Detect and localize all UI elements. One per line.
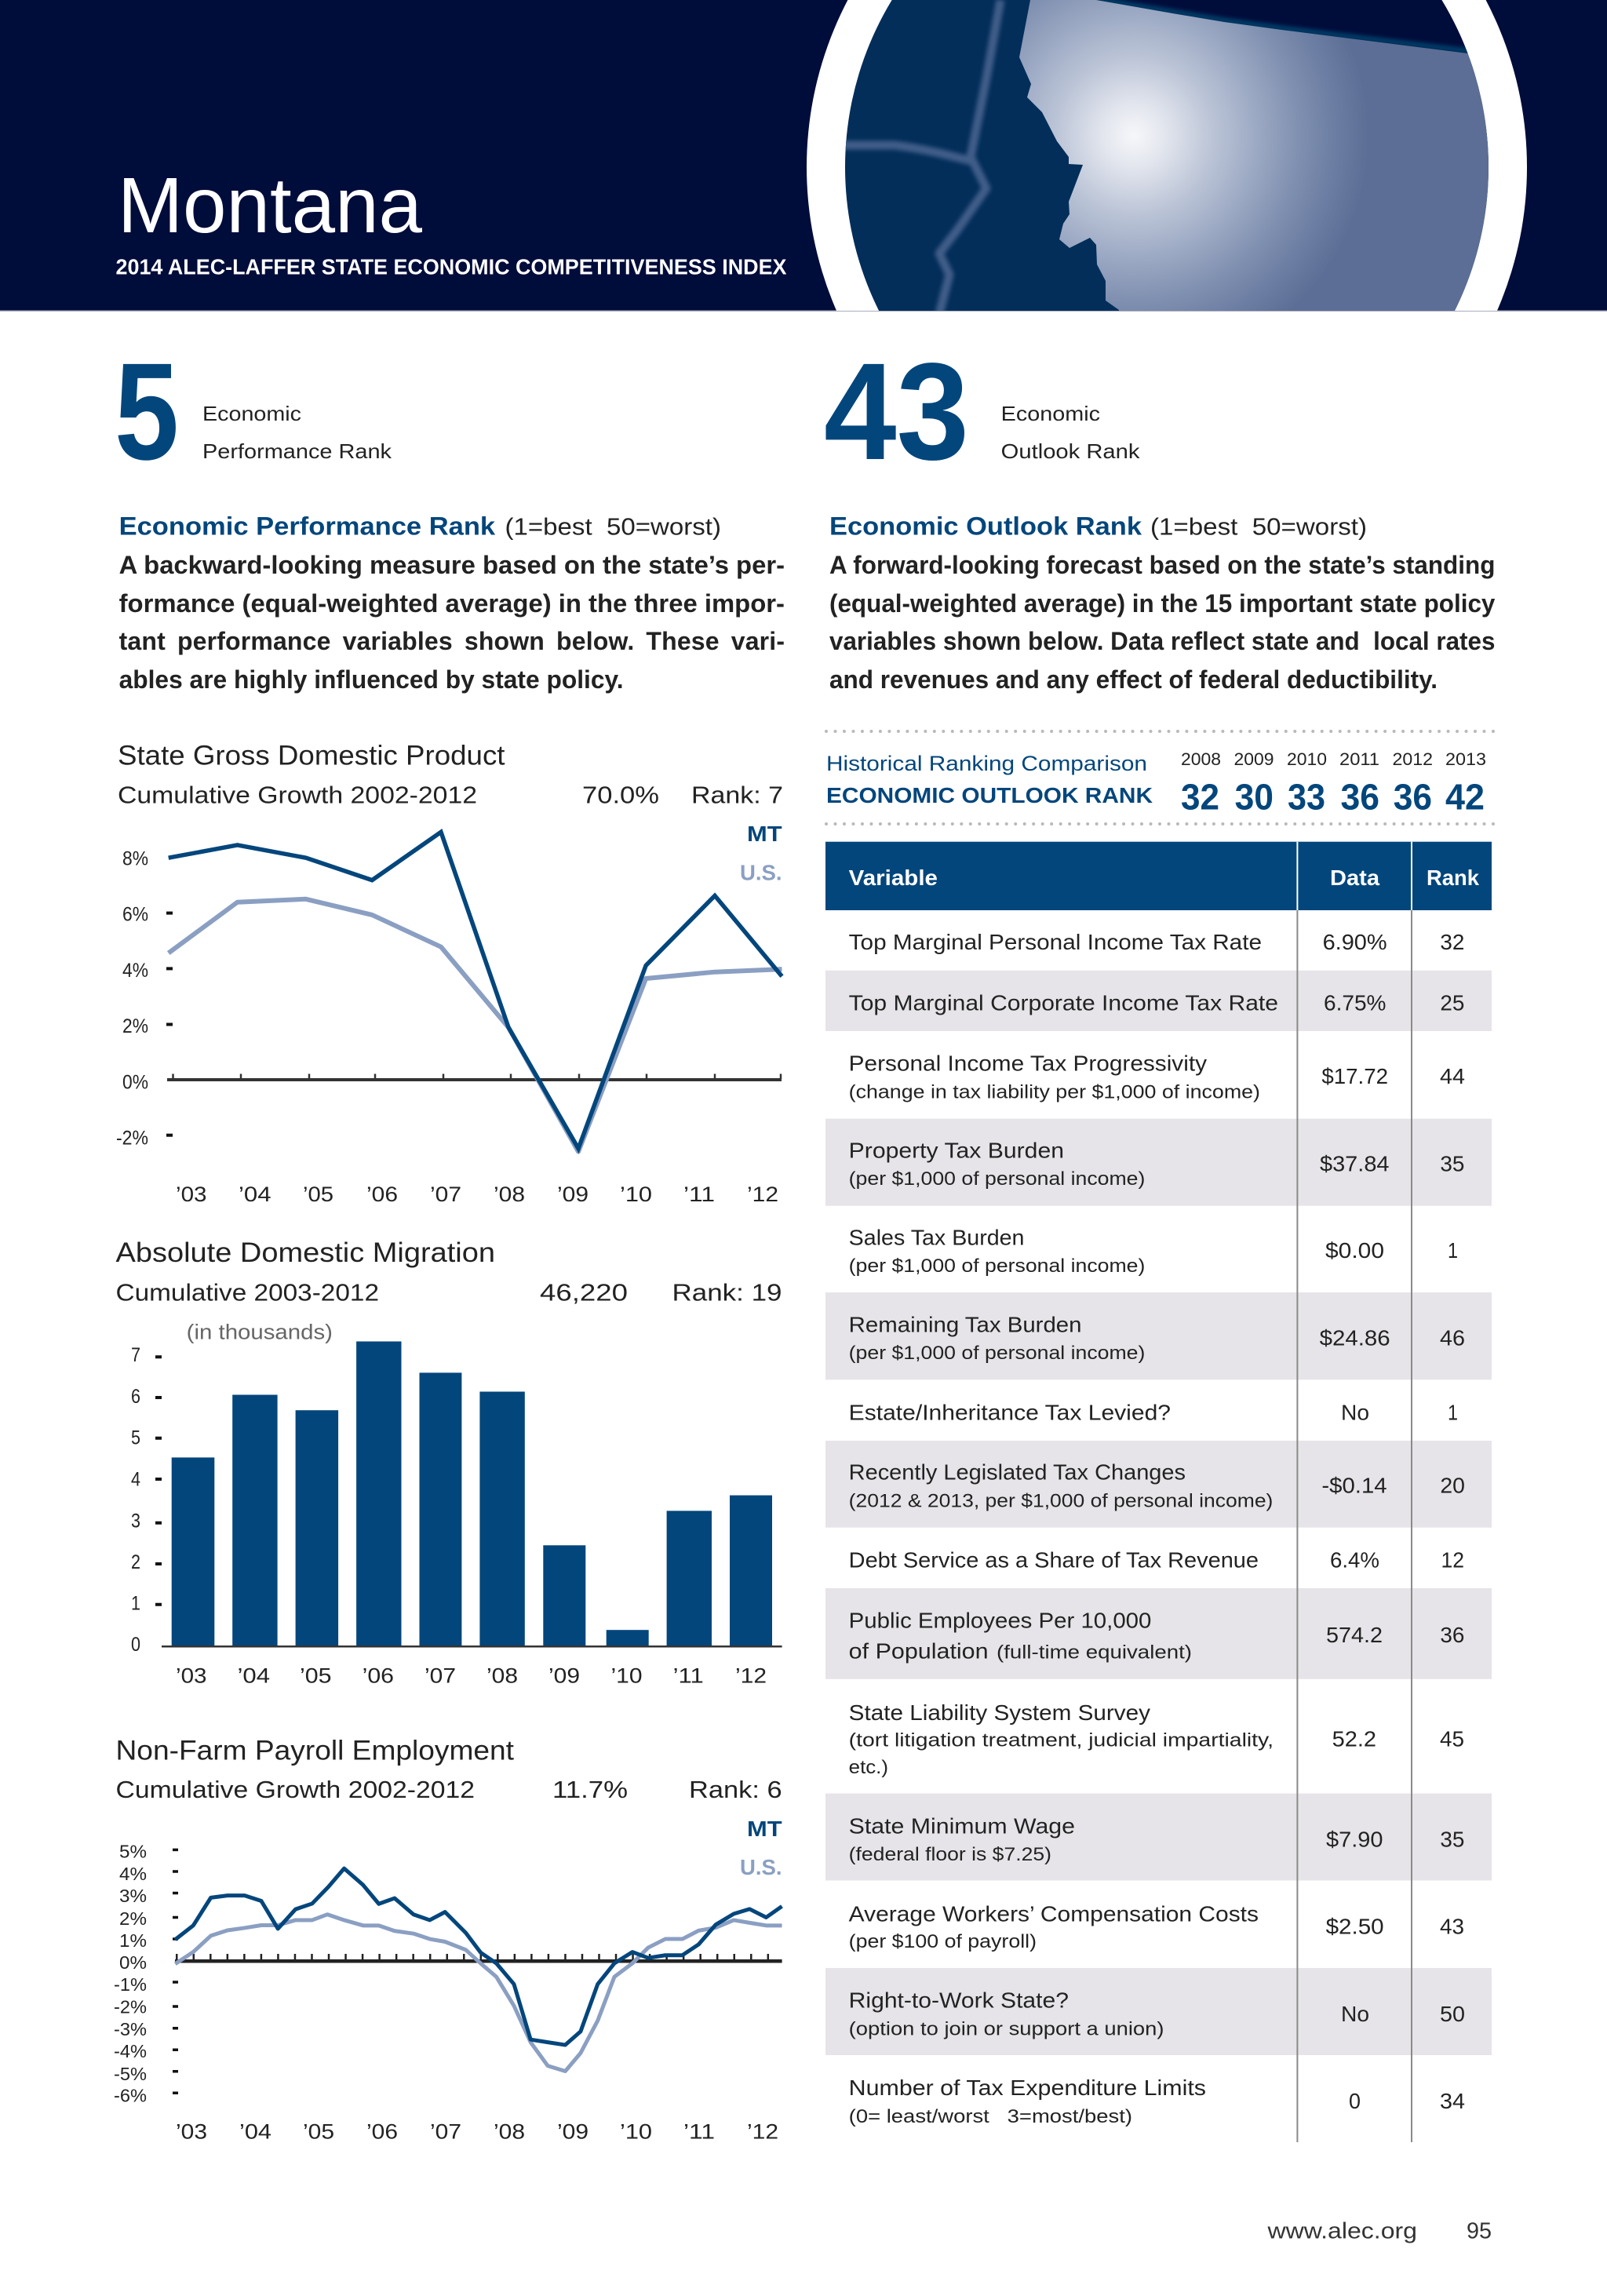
row: recently legislated tax changes: (2012 & 2013, per $1,000 of personal income) [849, 1491, 1273, 1512]
line: U.S. [175, 1915, 782, 2071]
row: recently legislated tax changes: Recently Legislated Tax Changes [849, 1460, 1186, 1485]
rank label: Outlook Rank [1001, 439, 1141, 463]
legend [740, 822, 782, 885]
y axis labels: 3% [119, 1886, 147, 1906]
icon: Montana map globe [807, 0, 1527, 311]
table header: Rank [1427, 866, 1479, 890]
row: sales tax burden [849, 1226, 1458, 1277]
x axis labels: ’06 [366, 1183, 398, 1206]
x axis labels: ’08 [494, 2120, 525, 2144]
chart heading [116, 1237, 782, 1307]
y axis labels: 0% [122, 1071, 148, 1093]
row: top marginal personal income tax rate: Top Marginal Personal Income Tax Rate [849, 930, 1262, 954]
x axis labels: ’12 [747, 2120, 778, 2144]
rank label: Economic [202, 402, 301, 425]
legend [740, 1817, 782, 1879]
row: public employees: of Population [849, 1638, 989, 1663]
legend: U.S. [740, 1855, 782, 1879]
row: property tax burden [849, 1139, 1464, 1190]
row: remaining tax burden: $24.86 [1320, 1326, 1390, 1350]
x axis labels: ’12 [735, 1664, 767, 1687]
row: workers' compensation: (per $100 of payroll) [849, 1931, 1037, 1952]
y axis labels [114, 1841, 147, 2105]
footer: www.alec.org [1266, 2219, 1417, 2244]
row: state minimum wage [849, 1813, 1464, 1865]
row: tax expenditure limits: 34 [1440, 2089, 1465, 2113]
x axis labels: ’09 [557, 2120, 589, 2144]
row: state minimum wage: $7.90 [1326, 1828, 1383, 1852]
historical ranks: 30 [1235, 777, 1274, 818]
chart heading: Rank: 6 [689, 1776, 782, 1803]
row: workers' compensation: $2.50 [1326, 1915, 1384, 1939]
row: top marginal corporate income tax rate: Top Marginal Corporate Income Tax Rate [849, 991, 1278, 1015]
y axis labels: 1% [119, 1930, 147, 1951]
y axis labels: 2 [131, 1551, 140, 1573]
y axis labels [131, 1344, 140, 1656]
rank label: Performance Rank [202, 439, 392, 463]
historical ranks: 36 [1394, 777, 1432, 818]
unit note: (in thousands) [187, 1320, 333, 1343]
row: top marginal corporate income tax rate [849, 991, 1464, 1015]
years: 2008 [1181, 749, 1221, 769]
baseline axis [162, 1645, 782, 1648]
row: debt service: Debt Service as a Share of Tax Revenue [849, 1547, 1259, 1572]
description text [119, 551, 785, 694]
line: U.S. [169, 899, 782, 1152]
description text: A backward-looking measure based on the state’s per- [119, 551, 785, 579]
row: right-to-work state: Right-to-Work State? [849, 1988, 1069, 2013]
x axis labels: ’09 [557, 1183, 589, 1206]
row: estate/inheritance tax: No [1341, 1400, 1369, 1424]
zero axis [167, 1073, 782, 1081]
legend: MT [747, 822, 782, 846]
chart heading: 11.7% [552, 1776, 628, 1803]
y axis labels [116, 848, 148, 1149]
x axis labels: ’05 [300, 1664, 331, 1687]
description text: ables are highly influenced by state policy. [119, 665, 624, 694]
chart heading: Non-Farm Payroll Employment [116, 1736, 514, 1766]
row: top marginal personal income tax rate [849, 930, 1464, 954]
row: personal income tax progressivity: 44 [1440, 1064, 1465, 1088]
x axis labels [176, 1664, 767, 1687]
table header [825, 842, 1492, 910]
row: remaining tax burden [849, 1313, 1465, 1364]
row: debt service: 12 [1441, 1547, 1464, 1572]
y axis labels: -6% [114, 2085, 147, 2105]
description text: tant performance variables shown below. These vari- [119, 627, 785, 655]
description text: (equal-weighted average) in the 15 important state policy [829, 589, 1496, 618]
row: state liability system survey: (tort litigation treatment, judicial impartiality, [849, 1729, 1274, 1751]
legend: U.S. [740, 861, 782, 885]
x axis labels: ’05 [303, 2120, 334, 2144]
table header: Variable [849, 866, 938, 890]
y axis labels: 0% [119, 1952, 147, 1973]
row: remaining tax burden: Remaining Tax Burden [849, 1313, 1081, 1337]
row: state minimum wage: State Minimum Wage [849, 1813, 1075, 1838]
x axis labels [176, 1183, 778, 1206]
row: personal income tax progressivity: (change in tax liability per $1,000 of income) [849, 1081, 1260, 1102]
chart heading [116, 1736, 782, 1803]
row: public employees: Public Employees Per 10,000 [849, 1608, 1151, 1632]
row: public employees: 36 [1440, 1623, 1464, 1647]
row: estate/inheritance tax [849, 1400, 1458, 1424]
comparison label: Historical Ranking Comparison [826, 752, 1147, 775]
y axis labels: -1% [114, 1974, 147, 1995]
panel: economic performance rank [115, 335, 785, 694]
row: property tax burden: 35 [1440, 1151, 1464, 1175]
x axis labels: ’10 [620, 1183, 652, 1206]
row: tax expenditure limits: 0 [1349, 2089, 1361, 2113]
comparison label: ECONOMIC OUTLOOK RANK [826, 783, 1153, 807]
x axis labels: ’04 [237, 1664, 270, 1687]
x axis labels: ’04 [239, 2120, 271, 2144]
row: debt service [849, 1547, 1464, 1572]
row: right-to-work state: 50 [1440, 2002, 1465, 2026]
y axis labels: 5 [131, 1427, 140, 1449]
row: workers' compensation: 43 [1440, 1915, 1464, 1939]
row: personal income tax progressivity: $17.72 [1321, 1064, 1388, 1088]
y axis labels: 8% [122, 848, 148, 870]
comparison label [826, 752, 1153, 807]
y axis labels: 4 [131, 1468, 140, 1490]
years: 2012 [1392, 749, 1433, 769]
chart heading: Cumulative 2003-2012 [116, 1279, 379, 1307]
x axis labels: ’04 [239, 1183, 271, 1206]
x axis labels [176, 2120, 778, 2144]
big rank number 43: 43 [824, 335, 969, 489]
row: public employees: (full-time equivalent) [997, 1642, 1192, 1663]
x axis labels: ’08 [494, 1183, 525, 1206]
x axis labels: ’06 [363, 1664, 394, 1687]
x axis labels: ’10 [610, 1664, 642, 1687]
row: public employees: 574.2 [1326, 1623, 1383, 1647]
chart heading: Rank: 19 [672, 1279, 782, 1307]
y axis labels: 2% [122, 1015, 148, 1037]
y axis labels: 7 [131, 1344, 140, 1366]
panel: historical ranking comparison [826, 749, 1486, 818]
footer: 95 [1467, 2219, 1492, 2244]
row: right-to-work state: (option to join or support a union) [849, 2018, 1164, 2040]
row: remaining tax burden: 46 [1440, 1326, 1465, 1350]
row: estate/inheritance tax: Estate/Inheritance Tax Levied? [849, 1400, 1171, 1424]
chart heading: Absolute Domestic Migration [116, 1237, 495, 1268]
years: 2013 [1445, 749, 1486, 769]
row: recently legislated tax changes: -$0.14 [1321, 1474, 1387, 1498]
y axis labels: 4% [122, 960, 148, 982]
description text: and revenues and any effect of federal deductibility. [829, 665, 1438, 694]
x axis labels: ’03 [176, 1664, 207, 1687]
row: recently legislated tax changes: 20 [1440, 1474, 1465, 1498]
description text: variables shown below. Data reflect state and local rates [829, 627, 1495, 655]
years [1181, 749, 1486, 769]
heading: (1=best 50=worst) [1150, 513, 1367, 540]
row: remaining tax burden: (per $1,000 of personal income) [849, 1343, 1145, 1364]
row: sales tax burden: (per $1,000 of personal income) [849, 1256, 1145, 1277]
y axis labels: -2% [116, 1127, 148, 1149]
header banner [0, 0, 1607, 312]
row: state liability system survey: etc.) [849, 1757, 888, 1778]
panel: economic outlook rank [824, 335, 1496, 694]
historical ranks: 32 [1181, 777, 1219, 818]
x axis labels: ’08 [486, 1664, 518, 1687]
row: personal income tax progressivity: Personal Income Tax Progressivity [849, 1051, 1207, 1075]
chart heading: 70.0% [582, 782, 659, 809]
description text: A forward-looking forecast based on the state’s standing [829, 551, 1495, 579]
heading: Economic Outlook Rank [829, 512, 1142, 540]
heading: Economic Performance Rank [119, 512, 495, 540]
historical ranks: 36 [1340, 777, 1379, 818]
zero axis [175, 1957, 782, 1963]
description text [829, 551, 1496, 694]
legend: MT [747, 1817, 782, 1841]
x axis labels: ’05 [303, 1183, 333, 1206]
x axis labels: ’03 [176, 2120, 207, 2144]
chart heading: State Gross Domestic Product [118, 741, 505, 771]
row: top marginal corporate income tax rate: 6.75% [1324, 991, 1386, 1015]
row: public employees [849, 1608, 1464, 1663]
x axis labels: ’12 [747, 1183, 778, 1206]
rank label [202, 402, 392, 463]
heading [119, 512, 721, 540]
footer [1266, 2219, 1492, 2244]
rank label [1001, 402, 1141, 463]
row: top marginal personal income tax rate: 6.90% [1323, 930, 1387, 954]
row: tax expenditure limits [849, 2076, 1465, 2127]
row: state minimum wage: 35 [1440, 1828, 1464, 1852]
row: state liability system survey: State Liability System Survey [849, 1700, 1150, 1725]
x axis labels: ’07 [430, 1183, 461, 1206]
historical ranks: 42 [1445, 777, 1485, 818]
y axis labels: 5% [119, 1841, 147, 1861]
row: sales tax burden: $0.00 [1325, 1238, 1384, 1263]
row: debt service: 6.4% [1330, 1547, 1379, 1572]
x axis labels: ’11 [673, 1664, 704, 1687]
x axis labels: ’07 [425, 1664, 456, 1687]
heading [829, 512, 1367, 540]
subtitle: 2014 ALEC-LAFFER STATE ECONOMIC COMPETITIVENESS INDEX [116, 254, 787, 279]
y axis labels: 6% [122, 904, 148, 926]
historical ranks [1181, 777, 1485, 818]
x axis labels: ’10 [620, 2120, 652, 2144]
row: top marginal corporate income tax rate: 25 [1440, 991, 1464, 1015]
row: sales tax burden: 1 [1448, 1238, 1458, 1263]
panel: state gross domestic product chart [116, 741, 783, 1206]
x axis labels: ’03 [176, 1183, 207, 1206]
bars [172, 1342, 772, 1646]
y axis labels: 1 [131, 1593, 140, 1615]
rank label: Economic [1001, 402, 1100, 425]
chart heading: Cumulative Growth 2002-2012 [116, 1776, 475, 1803]
chart heading: Rank: 7 [691, 782, 783, 809]
table: policy variables [825, 842, 1492, 2142]
row: state liability system survey: 45 [1440, 1726, 1464, 1751]
x axis labels: ’09 [548, 1664, 580, 1687]
row: personal income tax progressivity [849, 1051, 1465, 1102]
y axis labels: 4% [119, 1864, 147, 1884]
row: tax expenditure limits: (0= least/worst 3=most/best) [849, 2106, 1132, 2127]
title: Montana [118, 162, 422, 250]
y axis labels: 3 [131, 1510, 140, 1532]
historical ranks: 33 [1288, 777, 1325, 818]
row: property tax burden: (per $1,000 of personal income) [849, 1168, 1145, 1190]
row: sales tax burden: Sales Tax Burden [849, 1226, 1025, 1250]
row: workers' compensation: Average Workers’ Compensation Costs [849, 1901, 1259, 1926]
chart heading: 46,220 [540, 1279, 628, 1307]
row: state minimum wage: (federal floor is $7.25) [849, 1844, 1051, 1865]
x axis labels: ’06 [366, 2120, 398, 2144]
y axis labels: -5% [114, 2064, 147, 2084]
chart heading: Cumulative Growth 2002-2012 [118, 782, 477, 809]
panel: absolute domestic migration chart [116, 1237, 782, 1687]
table header: Data [1330, 866, 1379, 890]
row: property tax burden: Property Tax Burden [849, 1139, 1064, 1163]
row: estate/inheritance tax: 1 [1448, 1400, 1458, 1424]
line: MT [175, 1868, 782, 2045]
chart heading [118, 741, 783, 809]
x axis labels: ’11 [683, 2120, 715, 2144]
row: right-to-work state [849, 1988, 1465, 2040]
description text: formance (equal-weighted average) in the three impor- [119, 589, 785, 618]
x axis labels: ’07 [430, 2120, 461, 2144]
x axis labels: ’11 [683, 1183, 715, 1206]
row: tax expenditure limits: Number of Tax Expenditure Limits [849, 2076, 1206, 2100]
y axis labels: 0 [131, 1634, 140, 1656]
big rank number 5: 5 [115, 335, 179, 489]
heading: (1=best 50=worst) [505, 513, 721, 540]
y axis labels: -3% [114, 2019, 147, 2039]
row: top marginal personal income tax rate: 32 [1440, 930, 1464, 954]
years: 2010 [1287, 749, 1327, 769]
row: right-to-work state: No [1341, 2002, 1369, 2026]
row: state liability system survey [849, 1700, 1464, 1778]
y axis labels: 6 [131, 1386, 140, 1408]
years: 2011 [1339, 749, 1379, 769]
y axis labels: -2% [114, 1996, 147, 2017]
panel: non-farm payroll employment chart [114, 1736, 782, 2144]
line: MT [169, 832, 782, 1149]
row: state liability system survey: 52.2 [1332, 1726, 1376, 1751]
y axis labels: -4% [114, 2041, 147, 2061]
row: property tax burden: $37.84 [1320, 1151, 1389, 1175]
y axis labels: 2% [119, 1908, 147, 1929]
years: 2009 [1233, 749, 1274, 769]
row: recently legislated tax changes [849, 1460, 1465, 1512]
row: workers' compensation [849, 1901, 1464, 1952]
